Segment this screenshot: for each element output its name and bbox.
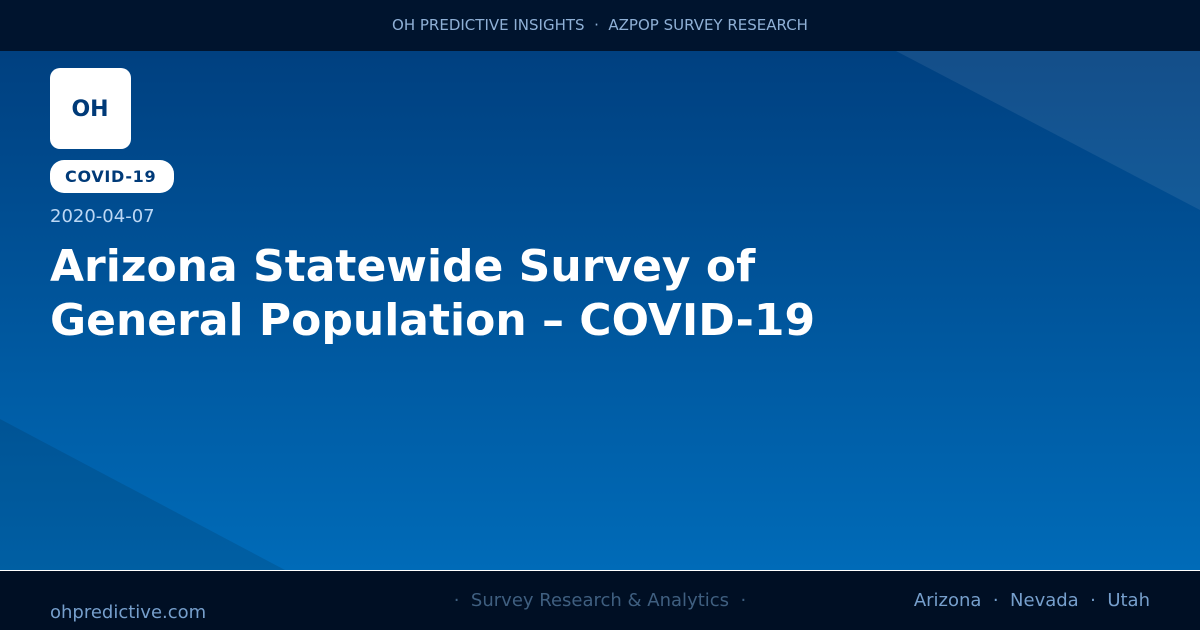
title: Arizona Statewide Survey of General Population – COVID-19 [50, 241, 815, 346]
footer tagline: · Survey Research & Analytics · [454, 590, 746, 611]
logo badge [50, 68, 131, 149]
category pill: COVID-19 [65, 167, 156, 186]
footer website: ohpredictive.com [50, 602, 206, 623]
footer regions: Arizona · Nevada · Utah [914, 590, 1150, 611]
top bar [0, 0, 1200, 51]
footer bar [0, 571, 1200, 630]
date: 2020-04-07 [50, 206, 155, 227]
footer divider line [0, 570, 1200, 571]
top bar text: OH PREDICTIVE INSIGHTS · AZPOP SURVEY RESEARCH [392, 16, 808, 34]
logo badge: OH [71, 97, 109, 122]
category pill [50, 160, 174, 193]
